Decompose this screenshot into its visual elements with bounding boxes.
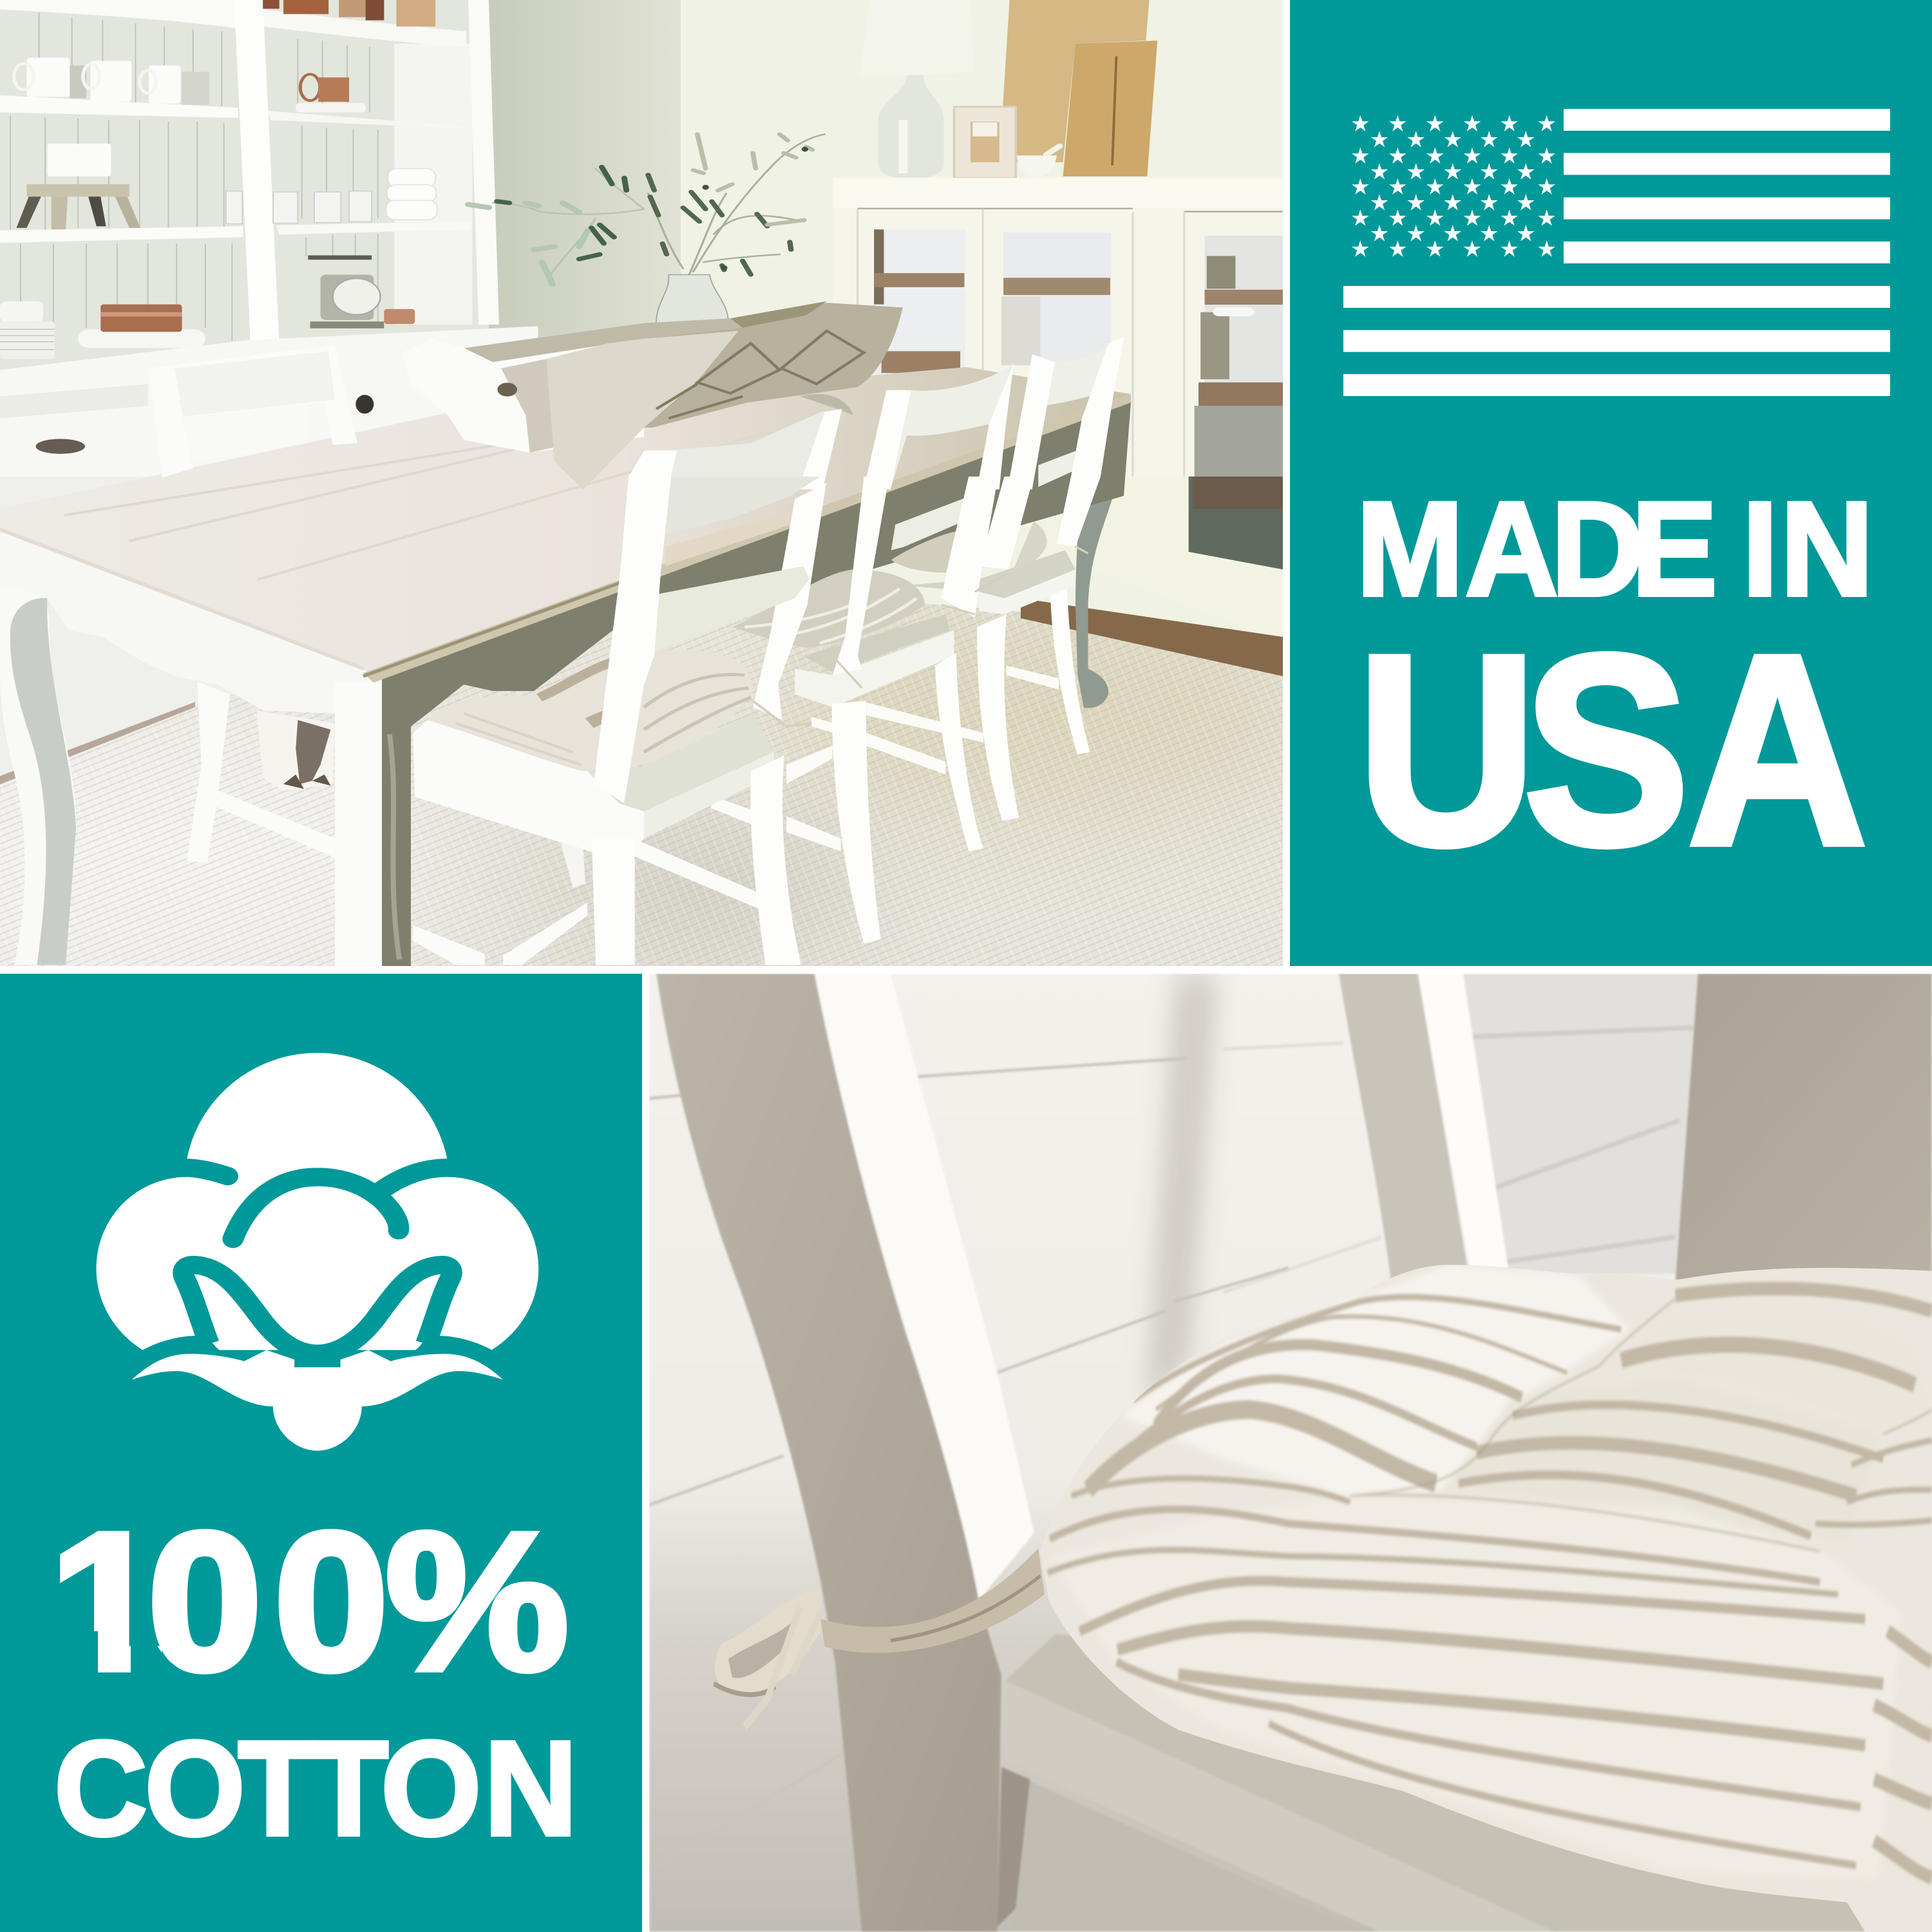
vase and branches [644, 134, 825, 340]
panel: 100% cotton [0, 974, 642, 1932]
trough [402, 323, 644, 489]
icon: cotton boll [96, 1053, 538, 1451]
table [0, 367, 1131, 966]
seat cushion [714, 1256, 1932, 1932]
left table leg [0, 587, 76, 965]
flag stripes [1343, 109, 1890, 396]
cutting boards [999, 0, 1157, 176]
chair upper backs [644, 337, 1124, 489]
lamp [860, 0, 974, 178]
tuft creases [1350, 1299, 1932, 1551]
rug [0, 580, 1320, 1011]
taupe post face [656, 973, 1001, 1932]
icon: American flag [1343, 109, 1890, 396]
cushion stripes [1047, 1289, 1932, 1878]
cushion tie [714, 1548, 1045, 1727]
hutch and wall [0, 0, 538, 489]
mugs [26, 58, 209, 105]
picture frame [954, 107, 1016, 178]
chair A, front chair [413, 483, 826, 965]
olive branches on hutch side [468, 167, 644, 284]
back chair and cat [187, 681, 335, 862]
heading: MADE IN: MADE IN [1356, 474, 1873, 624]
panel: chair cushion close-up photo [649, 973, 1932, 1932]
heading: USA: USA [1357, 598, 1868, 902]
hutch base [0, 327, 538, 489]
chair lower parts and cushions [619, 477, 1090, 943]
wall planks and chair post [649, 973, 1932, 1932]
panel: made in USA [1290, 0, 1932, 966]
chair A cushion [428, 650, 753, 772]
tuft highlights [1052, 1265, 1932, 1878]
chair A left post [594, 451, 677, 803]
lower cabinet [1021, 477, 1285, 643]
cabinet body [833, 178, 1288, 489]
text: COTTON: COTTON [54, 1714, 578, 1864]
copper pot and plates [0, 301, 205, 359]
chair C [891, 522, 1090, 821]
shelves [0, 0, 236, 28]
tin trough [644, 301, 903, 428]
panel: dining room photo [0, 0, 1320, 1011]
chair B [732, 477, 1088, 943]
seat surface, front edge and apron [1005, 1634, 1932, 1932]
text: 100%: 100% [50, 1492, 569, 1711]
flag stars [1352, 115, 1555, 257]
bowl on stool [17, 144, 140, 229]
bowl stack [386, 169, 437, 220]
far table leg [1075, 477, 1118, 708]
chair C right post [1057, 337, 1124, 547]
cat [257, 710, 335, 790]
glass door contents [874, 229, 1288, 489]
rungs [619, 665, 1059, 909]
copper mug [296, 74, 366, 112]
glasses [226, 191, 372, 224]
front chair rungs and rear leg [413, 842, 587, 965]
background wall and second chair back [1224, 973, 1932, 1293]
right cabinet and shelf objects [833, 0, 1288, 489]
books on top shelf [263, 0, 435, 26]
scale [308, 255, 415, 328]
